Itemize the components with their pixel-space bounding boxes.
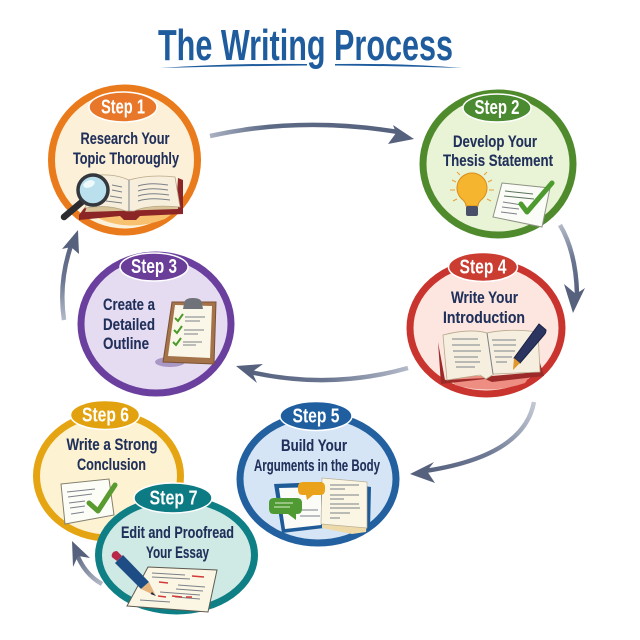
badge: step 6: Step 6 (82, 404, 129, 426)
badge: step 1 (89, 92, 157, 122)
text: step 2: Develop Your (453, 132, 537, 151)
text: step 5: Build Your (281, 436, 347, 455)
badge: step 4 (448, 252, 518, 282)
icon: papers and speech bubbles (269, 478, 371, 534)
badge: step 7: Step 7 (150, 488, 198, 510)
icon: document with check (61, 479, 115, 524)
text: step 5 (254, 436, 380, 475)
text: step 1: Topic Thoroughly (73, 149, 179, 168)
title: The Writing Process (158, 21, 453, 70)
badge: step 4: Step 4 (460, 256, 507, 278)
panel: step 4 (410, 252, 562, 394)
text: step 6: Conclusion (77, 455, 146, 474)
icon: open book and magnifier (64, 175, 183, 226)
text: step 5: Arguments in the Body (254, 456, 380, 475)
panel: step 6 (36, 400, 180, 538)
panel: step 5 (240, 402, 396, 543)
text: step 3: Outline (103, 334, 149, 353)
arrow: step 3 to step 1 (62, 230, 79, 320)
panel: step 7 (98, 483, 254, 612)
text: step 7 (121, 523, 234, 562)
text: step 4 (443, 288, 525, 327)
text: step 7: Edit and Proofread (121, 523, 234, 542)
text: step 3 (103, 295, 155, 353)
text: step 2 (443, 132, 553, 170)
text: step 4: Write Your (451, 288, 518, 307)
panel: step 1 (52, 88, 198, 232)
icon: clipboard checklist (155, 298, 216, 367)
badge: step 2: Step 2 (474, 97, 520, 119)
arrow: step 4 to step 5 (410, 402, 534, 483)
badge: step 5 (280, 402, 352, 430)
arrow: step 1 to step 2 (210, 125, 414, 144)
icon: light bulb (450, 172, 494, 216)
text: step 3: Detailed (103, 315, 155, 334)
badge: step 3: Step 3 (131, 256, 177, 278)
badge: step 5: Step 5 (292, 406, 340, 428)
text: step 4: Introduction (443, 308, 525, 327)
text: step 1: Research Your (80, 129, 170, 148)
text: step 2: Thesis Statement (443, 151, 553, 170)
panel: step 3 (81, 253, 231, 393)
badge: step 3 (120, 253, 188, 281)
badge: step 6 (70, 400, 140, 430)
badge: step 7 (134, 483, 212, 513)
badge: step 1: Step 1 (101, 96, 145, 118)
arrow: step 7 to step 6 (72, 541, 102, 584)
text: step 3: Create a (103, 295, 155, 314)
badge: step 2 (463, 94, 531, 122)
icon: marked-up paper and pencil (112, 551, 217, 612)
panel: step 2 (423, 93, 573, 235)
text: step 6: Write a Strong (66, 435, 158, 454)
arrow: step 4 to step 3 (236, 364, 408, 383)
text: step 1 (73, 129, 179, 168)
text: step 7: Your Essay (146, 543, 209, 562)
icon: open book with pen (438, 324, 546, 390)
arrow: step 2 to step 4 (560, 225, 585, 313)
icon: document with check (493, 183, 552, 227)
text: step 6 (66, 435, 158, 474)
